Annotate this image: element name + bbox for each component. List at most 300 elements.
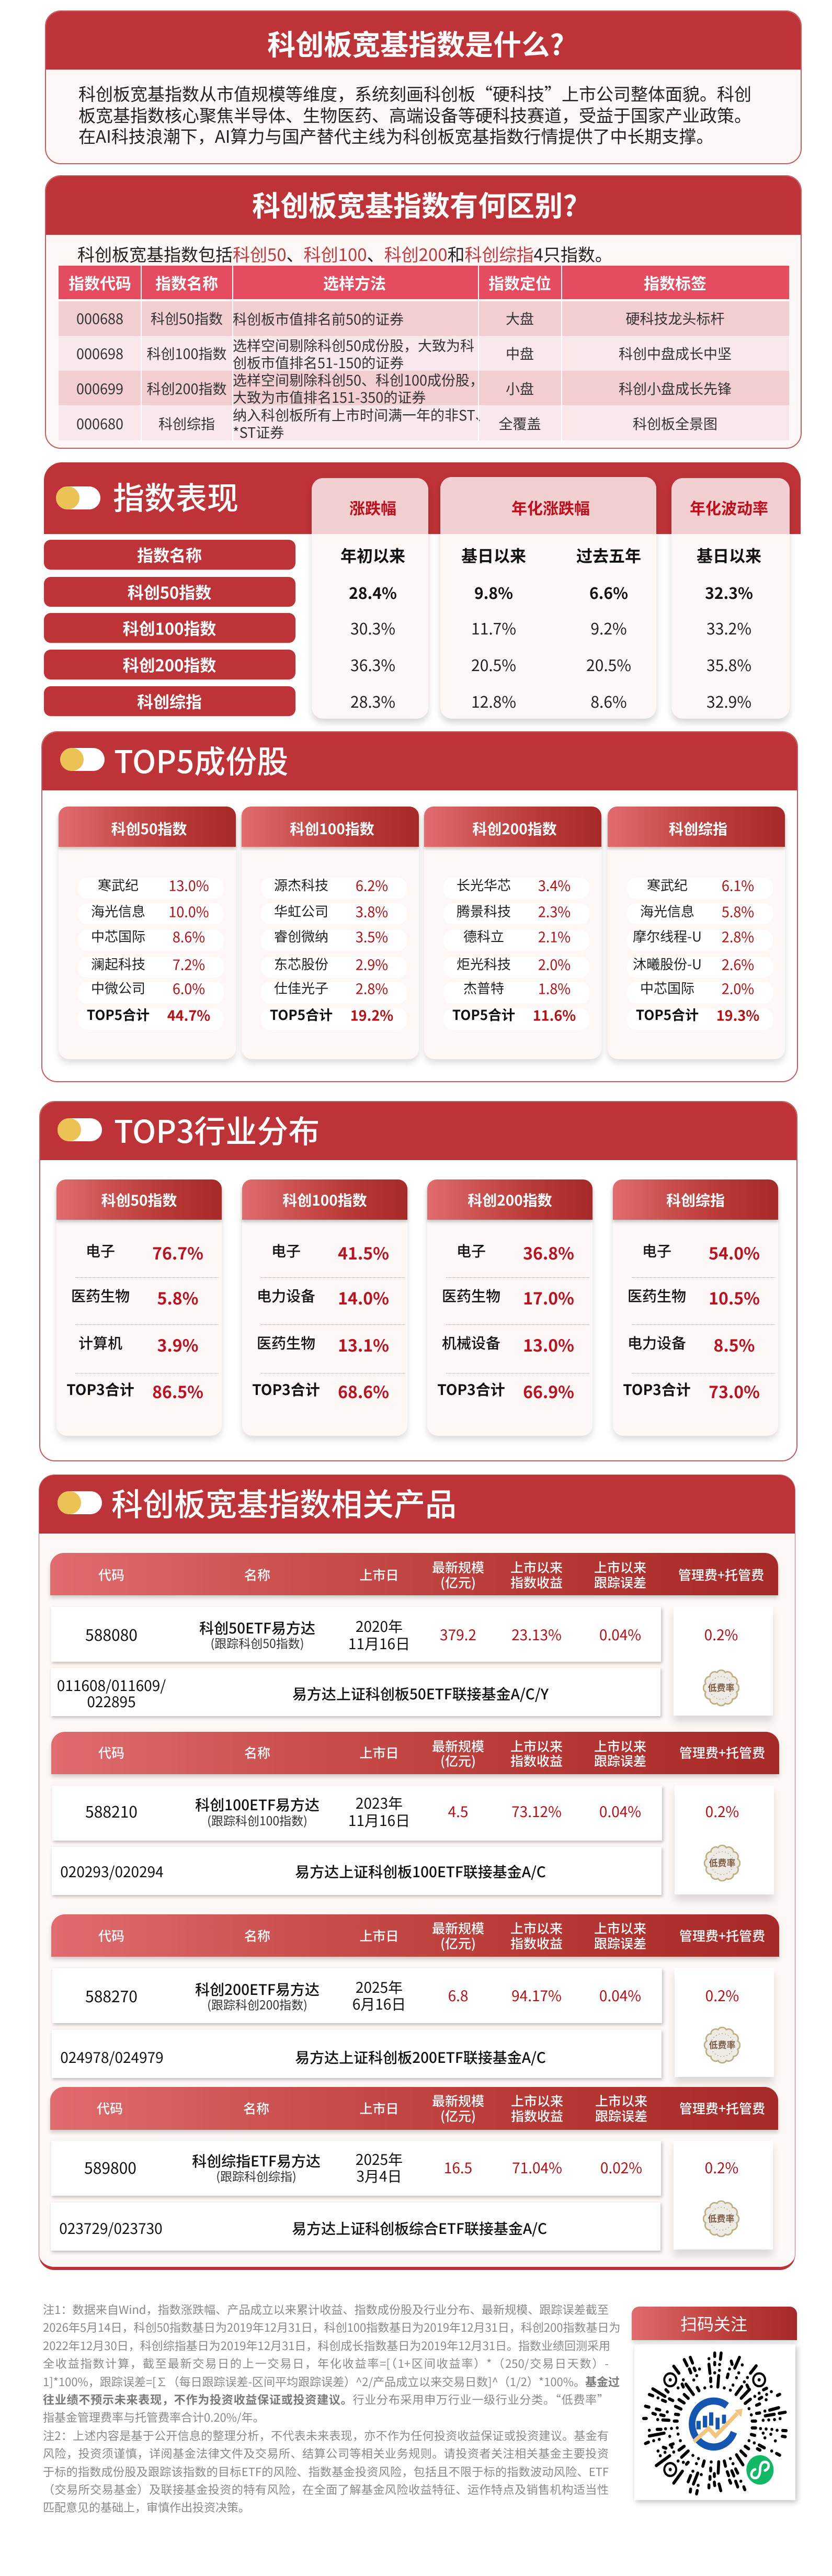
text block: footnotes: 2026年5月14日，科创50指数基日为2019年12月31日，科创100指数基日为2019年12月31日，科创200指数基日为 [43, 2319, 621, 2335]
card header: 科创综指 [669, 818, 727, 839]
QR dashes [644, 2353, 786, 2494]
icon: low fee badge: 低费率 [709, 1856, 735, 1869]
column header: volatility: 年化波动率 [690, 496, 768, 519]
column card: annualized volatility: 33.2% [706, 616, 751, 639]
row: 中微公司 [91, 978, 145, 997]
card header: 科创100指数 [282, 1189, 367, 1210]
row: 东芯股份 [274, 954, 328, 973]
table header: 代码 [98, 1565, 124, 1584]
feeder fund row [52, 2030, 662, 2078]
table header: 跟踪误差 [594, 1934, 646, 1953]
fee box: 0.2% [705, 2157, 738, 2178]
table header: 上市日 [359, 1565, 399, 1584]
table row: 000699: 大致为市值排名151-350的证券 [233, 387, 426, 407]
panel: TOP5 constituents [41, 731, 798, 1082]
table header: (亿元) [440, 1934, 476, 1953]
column header: volatility [671, 478, 790, 534]
table row: 000680: 000680 [76, 413, 123, 433]
row [78, 982, 224, 1004]
table header: 上市日 [359, 1926, 399, 1945]
table row: 000688: 硬科技龙头标杆 [625, 308, 725, 328]
table header: 跟踪误差 [595, 2106, 647, 2125]
table header: 跟踪误差 [594, 1751, 646, 1770]
table header: (亿元) [440, 2106, 476, 2125]
table header: 代码 [98, 1926, 124, 1945]
row label: index name: 指数名称 [137, 543, 202, 566]
table header: 跟踪误差 [594, 1573, 646, 1592]
row: 医药生物 [628, 1285, 686, 1306]
text block: footnotes: （交易所交易基金）及联接基金投资的特有风险，在全面了解基金风险收益特征、运作特点及销售机构适当性 [43, 2481, 609, 2498]
heading: TOP3: TOP3行业分布 [114, 1107, 320, 1152]
table row: 000688: 大盘 [506, 308, 534, 328]
table header: 名称 [244, 1926, 270, 1945]
table header: 指数收益 [511, 2106, 563, 2125]
row: 3.9% [157, 1333, 198, 1357]
row [442, 1285, 574, 1310]
row label: STAR composite [44, 686, 295, 716]
text block: footnotes: 指基金管理费率与托管费率合计0.20%/年。 [43, 2409, 265, 2425]
row label: STAR 200 [44, 650, 295, 679]
table row: 000680: *ST证券 [233, 422, 284, 442]
ETF row: 73.12% [511, 1801, 562, 1822]
table header [50, 1553, 778, 1595]
row: total [623, 1379, 760, 1403]
ETF row: 16.5 [444, 2157, 472, 2178]
fee box [674, 2141, 773, 2250]
table row: 000680: 全覆盖 [499, 413, 541, 433]
row: 17.0% [523, 1286, 574, 1310]
row [71, 1285, 198, 1310]
row [271, 1240, 389, 1265]
QR header [632, 2307, 797, 2340]
row: total: 68.6% [338, 1379, 389, 1403]
text block: footnotes [43, 2301, 621, 2515]
row [78, 878, 224, 899]
table row: 000699: 科创200指数 [147, 378, 226, 399]
table header row [59, 266, 789, 299]
feeder fund row [52, 1847, 662, 1895]
panel: QR code follow [630, 2307, 800, 2505]
row [257, 1285, 389, 1310]
table header: 上市以来 [510, 1558, 563, 1576]
row [443, 957, 589, 978]
panel: TOP3 industries [39, 1101, 797, 1461]
row: 睿创微纳 [274, 926, 328, 946]
card header [613, 1179, 778, 1220]
table header: 上市以来 [594, 1919, 646, 1937]
table row: 000688 [59, 301, 789, 336]
row: 2.0% [538, 954, 571, 974]
ETF row: 11月16日 [348, 1633, 410, 1654]
ETF row: 科创综指ETF易方达 [192, 2150, 321, 2171]
row: 腾景科技 [457, 901, 511, 921]
row: 澜起科技 [91, 954, 145, 973]
row: total: TOP5合计 [87, 1005, 150, 1024]
table header: (亿元) [440, 1751, 476, 1770]
row: 华虹公司 [274, 901, 328, 921]
table header: 最新规模 [432, 1919, 484, 1937]
row: 中芯国际 [640, 978, 694, 997]
table header: 指数收益 [510, 1751, 563, 1770]
ETF row [52, 1968, 662, 2023]
product group: 588080 [48, 1553, 780, 1724]
text block: footnotes: 于标的指数成份股及跟踪该指数的目标ETF的风险、指数基金投资风险，包括且不限于标的指数波动风险、ETF [43, 2463, 609, 2480]
row: 5.8% [722, 901, 754, 922]
row [443, 930, 589, 951]
table header: 指数收益 [510, 1573, 563, 1592]
row: 沐曦股份-U [633, 954, 702, 973]
card header [427, 1179, 592, 1220]
row: total [627, 1008, 773, 1030]
feeder fund row: 020293/020294 [60, 1861, 164, 1882]
column card: annualized change: 9.8% [474, 581, 513, 604]
row [443, 982, 589, 1004]
card header [242, 1179, 407, 1220]
row: 36.8% [523, 1241, 574, 1265]
table header: 名称 [244, 1565, 270, 1584]
table: index comparison [59, 266, 789, 442]
table header: 管理费+托管费 [679, 1926, 765, 1945]
ETF row: 588210 [85, 1799, 138, 1822]
row [442, 1332, 574, 1357]
row: total: TOP3合计 [437, 1379, 505, 1400]
table row: 000699 [59, 371, 789, 405]
row: total: 19.2% [350, 1004, 393, 1025]
QR white card [634, 2344, 795, 2500]
table header [51, 1914, 779, 1957]
row: 13.0% [168, 875, 209, 895]
text block: description: 板宽基指数核心聚焦半导体、生物医药、高端设备等硬科技赛道，受益于国家产业政策。 [78, 101, 751, 127]
row: total: TOP3合计 [623, 1379, 691, 1400]
QR header: 扫码关注 [680, 2311, 747, 2335]
heading: index performance: 指数表现 [113, 473, 238, 519]
fee box: 0.2% [705, 1801, 739, 1822]
row [628, 1332, 755, 1357]
card header: 科创综指 [666, 1189, 725, 1210]
row: 13.0% [523, 1333, 574, 1357]
table header row: 选样方法 [323, 271, 386, 294]
row: 炬光科技 [457, 954, 511, 973]
table header: 上市以来 [594, 1558, 646, 1576]
row: 医药生物 [442, 1285, 500, 1306]
ETF row [51, 1607, 661, 1662]
row [627, 982, 773, 1004]
icon: QR mini program code [642, 2352, 788, 2495]
product group: 588210 [49, 1732, 781, 1903]
fee box [674, 1607, 773, 1716]
column card: annualized volatility: 32.9% [706, 689, 751, 712]
row: 41.5% [338, 1241, 389, 1265]
table row: 000698: 000698 [76, 343, 123, 363]
text block: footnotes: 风险，投资须谨慎，详阅基金法律文件及交易所、结算公司等相关业务规则。请投资者关注相关基金主要投资 [43, 2445, 609, 2461]
fee box [675, 1786, 774, 1894]
icon: low fee badge [703, 1670, 739, 1706]
text block: description [78, 81, 751, 148]
heading: what is [45, 10, 802, 70]
table row: 000698: 创板市值排名51-150的证券 [233, 351, 404, 372]
feeder fund row: 011608/011609/ [57, 1675, 166, 1696]
column card: change: 28.4% [349, 581, 397, 604]
row: 2.8% [722, 926, 754, 947]
ETF row: (跟踪科创50指数) [210, 1634, 304, 1652]
row: 寒武纪 [98, 875, 139, 894]
row [627, 930, 773, 951]
row: 电子 [86, 1240, 115, 1261]
table row: 000699: 科创小盘成长先锋 [619, 378, 732, 399]
table header: 上市以来 [594, 1737, 646, 1755]
row label: STAR 50 [44, 577, 295, 607]
row: total: 11.6% [533, 1004, 576, 1025]
card header: 科创200指数 [472, 818, 557, 839]
table header: 代码 [97, 2098, 123, 2117]
feeder fund row: 023729/023730 [59, 2218, 163, 2239]
text block: description: 在AI科技浪潮下，AI算力与国产替代主线为科创板宽基指数行情提供了中长期支撑。 [78, 123, 713, 148]
heading: what is: 科创板宽基指数是什么? [267, 22, 564, 63]
icon: low fee badge: 低费率 [708, 1681, 734, 1694]
icon: mini program [746, 2455, 773, 2484]
feeder fund row: 易方达上证科创板50ETF联接基金A/C/Y [292, 1683, 549, 1704]
row [443, 878, 589, 899]
icon: low fee badge [704, 2026, 740, 2064]
table header row: 指数名称 [155, 271, 218, 294]
table header: (亿元) [440, 1573, 476, 1592]
table row: 000698: 科创中盘成长中坚 [619, 343, 732, 363]
row: 6.0% [173, 978, 205, 998]
table header: 最新规模 [432, 1737, 484, 1755]
row: 电力设备 [628, 1332, 686, 1353]
heading: products: 科创板宽基指数相关产品 [111, 1480, 457, 1525]
card header: 科创200指数 [468, 1189, 552, 1210]
column card: change: 30.3% [350, 616, 395, 639]
column card: annualized change: 过去五年 [576, 543, 641, 567]
row label: index name [44, 540, 295, 570]
column card: annualized change: 8.6% [590, 689, 627, 712]
table header: 代码 [98, 1743, 124, 1762]
text block: footnotes: 匹配意见的基础上，审慎作出投资决策。 [43, 2499, 250, 2515]
table row: 000688: 000688 [76, 308, 123, 328]
row [457, 1240, 574, 1265]
ETF row [52, 1786, 662, 1841]
text block: description: 科创板宽基指数从市值规模等维度，系统刻画科创板“硬科技”上市公司整体面貌。科创 [78, 81, 751, 106]
row: total: 73.0% [709, 1379, 760, 1403]
table header [50, 2087, 778, 2130]
row: 1.8% [538, 978, 571, 998]
row: 机械设备 [442, 1332, 500, 1353]
ETF row: 588080 [85, 1622, 138, 1646]
column card: annualized change: 20.5% [471, 653, 516, 676]
ETF row: 4.5 [448, 1801, 468, 1822]
ETF row: 94.17% [511, 1985, 562, 2006]
icon: toggle [58, 1491, 102, 1514]
row: 源杰科技 [274, 875, 328, 894]
row: 海光信息 [91, 901, 145, 921]
feeder fund row: 022895 [87, 1691, 136, 1712]
row [627, 878, 773, 899]
row: 3.5% [356, 926, 388, 947]
table row: 000698: 选样空间剔除科创50成份股，大致为科 [233, 335, 474, 355]
row: 6.1% [722, 875, 754, 895]
row: 8.6% [173, 926, 205, 947]
panel: what is the index [45, 10, 802, 164]
ETF row: (跟踪科创100指数) [207, 1811, 307, 1829]
column card: annualized change: 12.8% [471, 689, 516, 712]
row [642, 1240, 760, 1265]
row: 医药生物 [257, 1332, 315, 1353]
ETF row: (跟踪科创200指数) [207, 1995, 307, 2013]
row: total [252, 1379, 389, 1403]
table header: 名称 [244, 1743, 270, 1762]
text block: footnotes: 1]*100%，跟踪误差=[∑（每日跟踪误差-区间平均跟踪误差）^2/产品成立以来交易日数]^（1/2）*100%。基金过 [43, 2373, 620, 2390]
table row: 000680: 科创板全景图 [633, 413, 717, 433]
feeder fund row: 易方达上证科创板综合ETF联接基金A/C [292, 2218, 547, 2239]
table header: 上市日 [359, 2098, 399, 2117]
ETF row: 23.13% [511, 1624, 562, 1645]
row: total: 19.3% [716, 1004, 759, 1025]
text block: footnotes: 2022年12月30日，科创综指基日为2019年12月31日，科创成长指数基日为2019年12月31日。指数业绩回测采用 [43, 2337, 610, 2354]
heading: TOP5: TOP5成份股 [114, 737, 288, 782]
table row: 000698: 中盘 [506, 343, 534, 363]
feeder fund row [51, 1668, 660, 1716]
panel header: TOP3 [39, 1101, 797, 1160]
table header: 最新规模 [432, 2091, 484, 2110]
product group: 589800 [48, 2087, 780, 2259]
ETF row: 6月16日 [352, 1993, 406, 2014]
table row: 000699: 000699 [76, 378, 123, 399]
ETF row: 0.04% [599, 1624, 641, 1645]
ETF row [51, 2141, 661, 2196]
ETF row: 2020年 [356, 1616, 403, 1637]
ETF row: 11月16日 [348, 1810, 410, 1831]
icon: low fee badge: 低费率 [709, 2038, 735, 2051]
table row: 000698: 科创100指数 [147, 343, 226, 363]
column card: change: 28.3% [350, 689, 395, 712]
card: TOP5 STAR 50 [59, 807, 236, 1059]
ETF row: 2025年 [356, 1977, 403, 1998]
card: TOP3 STAR 50 [56, 1179, 222, 1436]
row: 7.2% [173, 954, 205, 974]
icon: low fee badge: 低费率 [708, 2211, 734, 2225]
row: total [443, 1008, 589, 1030]
row: total: TOP5合计 [270, 1005, 333, 1024]
row [78, 1332, 198, 1357]
row [261, 982, 407, 1004]
feeder fund row: 024978/024979 [60, 2047, 164, 2068]
ETF row: 3月4日 [356, 2165, 402, 2186]
panel: related products [39, 1474, 795, 2270]
row: 中芯国际 [91, 926, 145, 946]
row: 长光华芯 [457, 875, 511, 894]
row: 6.2% [356, 875, 388, 895]
row: 8.5% [714, 1333, 755, 1357]
row: 寒武纪 [647, 875, 688, 894]
row: 2.0% [722, 978, 754, 998]
row: 电子 [271, 1240, 301, 1261]
card header [242, 807, 419, 847]
ETF row: 0.04% [599, 1985, 641, 2006]
column card: annualized change: 11.7% [471, 616, 516, 639]
row: total: 44.7% [167, 1004, 210, 1025]
table header: 最新规模 [432, 1558, 484, 1576]
table header: 上市以来 [510, 1919, 563, 1937]
fee box [675, 1968, 774, 2077]
row: total: TOP5合计 [452, 1005, 515, 1024]
logo: blue C and bars [692, 2401, 743, 2447]
card header [608, 807, 785, 847]
panel header: TOP5 [41, 731, 798, 790]
row [78, 930, 224, 951]
icon: toggle [60, 748, 105, 771]
row: 76.7% [152, 1241, 203, 1265]
row [627, 957, 773, 978]
column header: annualized change: 年化涨跌幅 [511, 496, 590, 519]
row [261, 903, 407, 924]
icon: low fee badge [703, 2200, 739, 2238]
table header: 上市以来 [595, 2091, 647, 2110]
row: 海光信息 [640, 901, 694, 921]
table header: 名称 [243, 2098, 269, 2117]
table row: 000680 [59, 406, 789, 440]
ETF row: 588270 [85, 1984, 138, 2007]
table row: 000698 [59, 336, 789, 371]
card: TOP3 STAR composite [613, 1179, 778, 1436]
column header: annualized change [440, 477, 656, 534]
row label: STAR 100: 科创100指数 [123, 616, 216, 639]
card header: 科创100指数 [290, 818, 374, 839]
ETF row: 589800 [84, 2155, 136, 2178]
row [443, 903, 589, 924]
ETF row: 2025年 [356, 2149, 403, 2170]
column card: annualized change [440, 477, 656, 719]
card header [424, 807, 601, 847]
row label: STAR composite: 科创综指 [137, 689, 202, 712]
table header: 管理费+托管费 [679, 1743, 765, 1762]
text block: footnotes: 注2：上述内容是基于公开信息的整理分析，不代表未来表现，亦不作为任何投资收益保证或投资建议。基金有 [43, 2427, 609, 2444]
row: 5.8% [157, 1286, 198, 1310]
ETF row: 379.2 [440, 1624, 476, 1645]
row: total: 66.9% [523, 1379, 574, 1403]
ETF row: 6.8 [448, 1985, 468, 2006]
ETF row: 0.02% [600, 2157, 642, 2178]
row [261, 930, 407, 951]
ETF row: 2023年 [356, 1792, 403, 1813]
ETF row: 科创50ETF易方达 [199, 1617, 315, 1638]
row [78, 957, 224, 978]
row [628, 1285, 760, 1310]
row [78, 903, 224, 924]
row: 电力设备 [257, 1285, 315, 1306]
table row: 000699: 选样空间剔除科创50、科创100成份股， [233, 369, 484, 390]
card header: 科创50指数 [111, 818, 187, 839]
column card: annualized change: 基日以来 [461, 543, 526, 567]
table header [51, 1732, 779, 1774]
row [86, 1240, 203, 1265]
card: TOP3 STAR 200 [427, 1179, 592, 1436]
table row: 000680: 科创综指 [158, 413, 215, 433]
column card: annualized change: 9.2% [590, 616, 627, 639]
table header: 指数收益 [510, 1934, 563, 1953]
row: 2.6% [722, 954, 754, 974]
table row: 000680: 纳入科创板所有上市时间满一年的非ST、 [233, 404, 489, 425]
column card: annualized volatility [671, 478, 790, 719]
column card: annualized volatility: 基日以来 [697, 543, 761, 567]
row: 2.1% [538, 926, 571, 947]
table header row: 指数定位 [488, 271, 551, 294]
row: 电子 [457, 1240, 486, 1261]
ETF row: 科创200ETF易方达 [195, 1979, 320, 2000]
QR finder eyes [664, 2374, 765, 2476]
heading: differences [45, 175, 802, 235]
feeder fund row: 易方达上证科创板200ETF联接基金A/C [295, 2047, 546, 2068]
